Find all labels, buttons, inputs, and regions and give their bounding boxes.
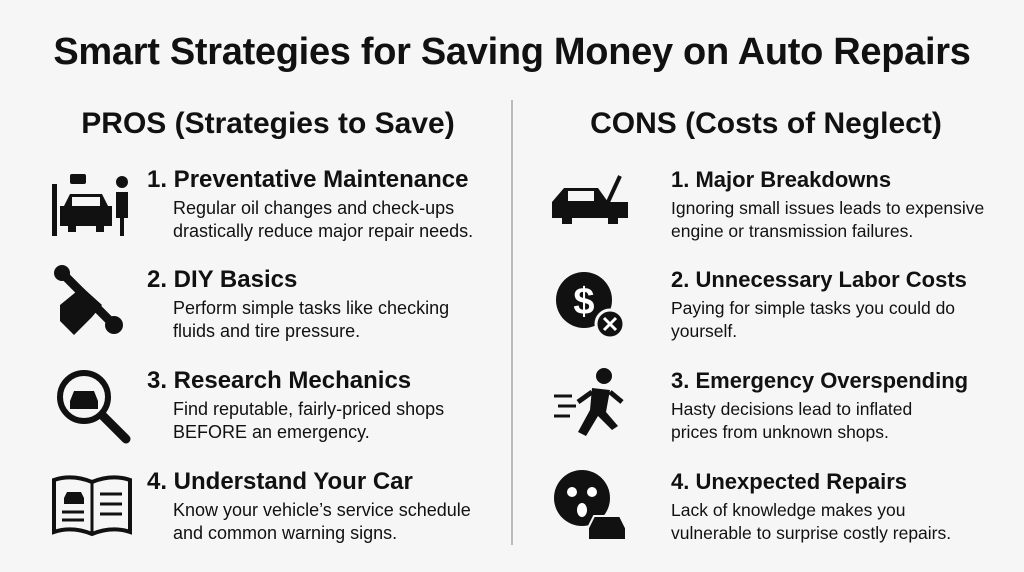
item: DIY basics: 2. DIY Basics	[147, 266, 297, 293]
item: understand your car: Know your vehicle’s service schedule	[173, 500, 471, 520]
item: preventative maintenance: Regular oil changes and check-ups	[173, 198, 454, 218]
heading: pros: PROS (Strategies to Save)	[81, 107, 455, 140]
icon: mechanic car	[52, 174, 128, 236]
item: major breakdowns	[671, 167, 984, 241]
icon: wrench hand	[54, 265, 123, 335]
item: major breakdowns: 1. Major Breakdowns	[671, 167, 891, 192]
item: major breakdowns: engine or transmission failures.	[671, 221, 913, 241]
icon: dollar x: $	[573, 281, 595, 323]
item: unexpected repairs: vulnerable to surprise costly repairs.	[671, 523, 951, 543]
item: understand your car	[147, 468, 471, 543]
heading: cons: CONS (Costs of Neglect)	[590, 107, 942, 140]
item: emergency overspending: Hasty decisions lead to inflated	[671, 399, 912, 419]
icon: dollar x	[556, 272, 622, 336]
item: emergency overspending: prices from unknown shops.	[671, 422, 889, 442]
item: DIY basics: fluids and tire pressure.	[173, 321, 360, 341]
icon: magnifier car	[57, 370, 130, 444]
item: research mechanics	[147, 367, 444, 442]
item: unnecessary labor: 2. Unnecessary Labor Costs	[671, 267, 967, 292]
item: unnecessary labor: yourself.	[671, 321, 737, 341]
icon: shocked face car	[554, 470, 625, 539]
item: emergency overspending	[671, 368, 968, 442]
item: research mechanics: BEFORE an emergency.	[173, 422, 370, 442]
item: preventative maintenance: 1. Preventative Maintenance	[147, 166, 468, 193]
item: emergency overspending: 3. Emergency Overspending	[671, 368, 968, 393]
item: major breakdowns: Ignoring small issues leads to expensive	[671, 198, 984, 218]
item: research mechanics: Find reputable, fairly-priced shops	[173, 399, 444, 419]
item: DIY basics	[147, 266, 449, 341]
title: Smart Strategies for Saving Money on Auto Repairs	[53, 31, 971, 73]
item: preventative maintenance	[147, 166, 473, 241]
icon: broken car	[552, 175, 628, 224]
item: preventative maintenance: drastically reduce major repair needs.	[173, 221, 473, 241]
item: unexpected repairs: Lack of knowledge makes you	[671, 500, 905, 520]
item: unnecessary labor	[671, 267, 967, 341]
item: DIY basics: Perform simple tasks like checking	[173, 298, 449, 318]
icon: running person	[554, 368, 624, 436]
item: understand your car: 4. Understand Your Car	[147, 468, 413, 495]
item: research mechanics: 3. Research Mechanics	[147, 367, 411, 394]
item: unexpected repairs	[671, 469, 951, 543]
item: understand your car: and common warning signs.	[173, 523, 397, 543]
item: unnecessary labor: Paying for simple tasks you could do	[671, 298, 955, 318]
item: unexpected repairs: 4. Unexpected Repairs	[671, 469, 907, 494]
icon: manual book	[52, 475, 132, 536]
